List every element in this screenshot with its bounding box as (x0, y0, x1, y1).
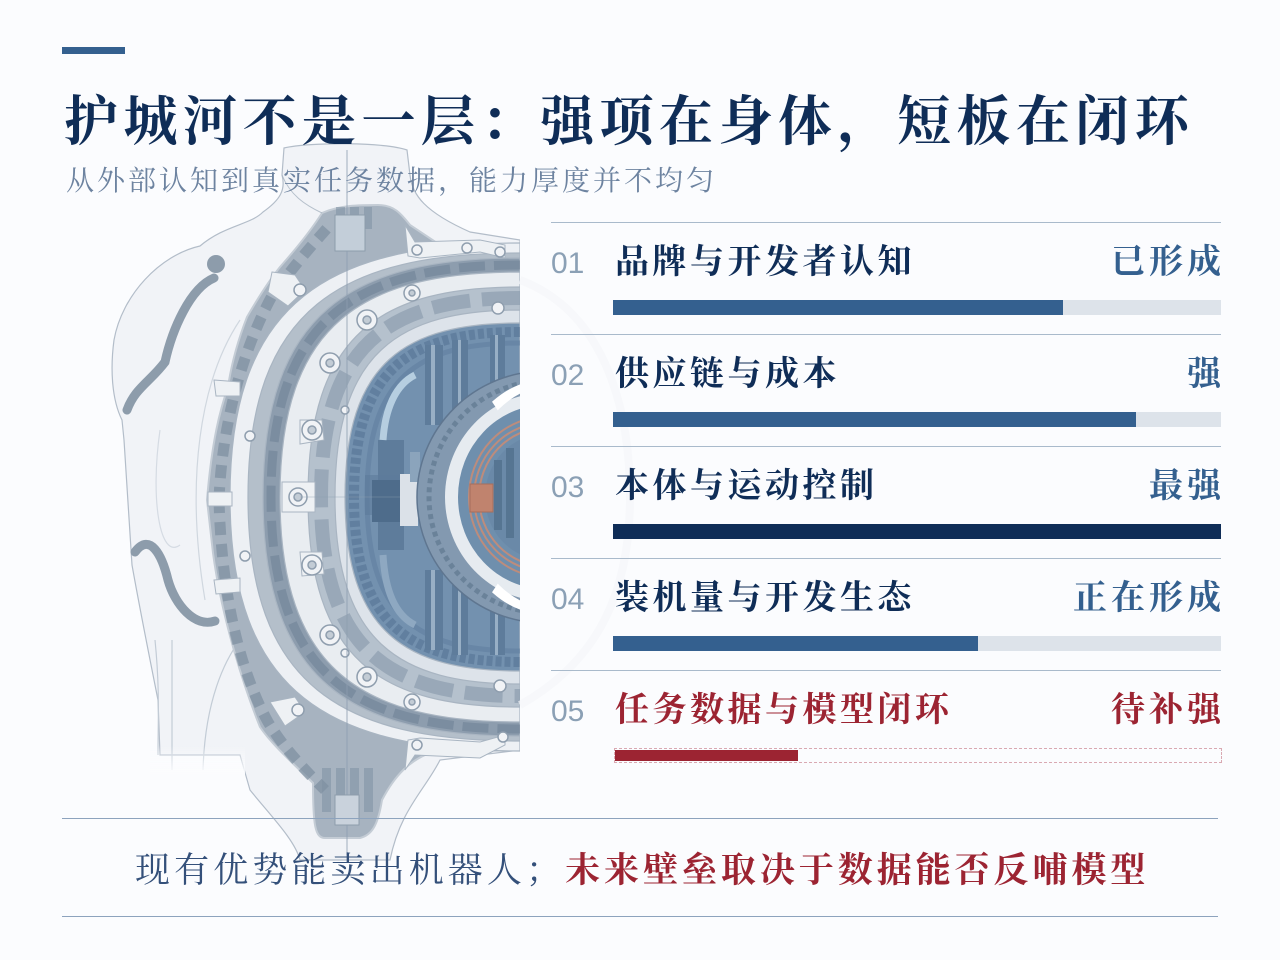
inner core ring (416, 372, 520, 622)
dark shell band (207, 205, 520, 838)
row 03: 本体与运动控制 (615, 468, 878, 505)
icon: copper chip (470, 484, 493, 512)
ghost rings right (520, 280, 630, 705)
subtitle: 从外部认知到真实任务数据，能力厚度并不均匀 (66, 166, 717, 197)
row 05: 待补强 (1111, 692, 1225, 729)
construction lines (282, 150, 400, 855)
row 03: 03 (551, 471, 584, 504)
row 04: 04 (551, 583, 584, 616)
neck block (335, 215, 365, 251)
white clamp links (208, 225, 505, 770)
bottom rule bottom (62, 916, 1218, 917)
row 04: 正在形成 (1073, 580, 1225, 617)
row 03: 最强 (1149, 468, 1225, 505)
body silhouette (112, 144, 520, 860)
row 01 (551, 222, 1225, 315)
title: 护城河不是一层：强项在身体，短板在闭环 (64, 92, 1194, 152)
ring block texture (271, 265, 520, 729)
bolts (240, 243, 508, 750)
row 02: 强 (1187, 356, 1225, 393)
row 04: 装机量与开发生态 (615, 580, 915, 617)
bottom rule top (62, 818, 1218, 819)
bottom takeaway: 现有优势能卖出机器人；未来壁垒取决于数据能否反哺模型 (135, 851, 1149, 890)
concentric rings (230, 243, 520, 751)
row 01: 已形成 (1111, 244, 1225, 281)
row 03 (551, 446, 1225, 539)
shell block texture (219, 218, 378, 790)
row 02: 供应链与成本 (615, 356, 840, 393)
row 05: 05 (551, 695, 584, 728)
row 01: 01 (551, 247, 584, 280)
row 05: 任务数据与模型闭环 (615, 692, 952, 729)
row 02: 02 (551, 359, 584, 392)
row 05 (551, 670, 1225, 763)
top accent bar (62, 47, 125, 54)
shoulder cutaway slots (127, 255, 225, 622)
row 02 (551, 334, 1225, 427)
row 04 (551, 558, 1225, 651)
illustration: robot torso cutaway (112, 143, 520, 861)
row 01: 品牌与开发者认知 (615, 244, 915, 281)
inner mechanism pipes (365, 335, 505, 655)
